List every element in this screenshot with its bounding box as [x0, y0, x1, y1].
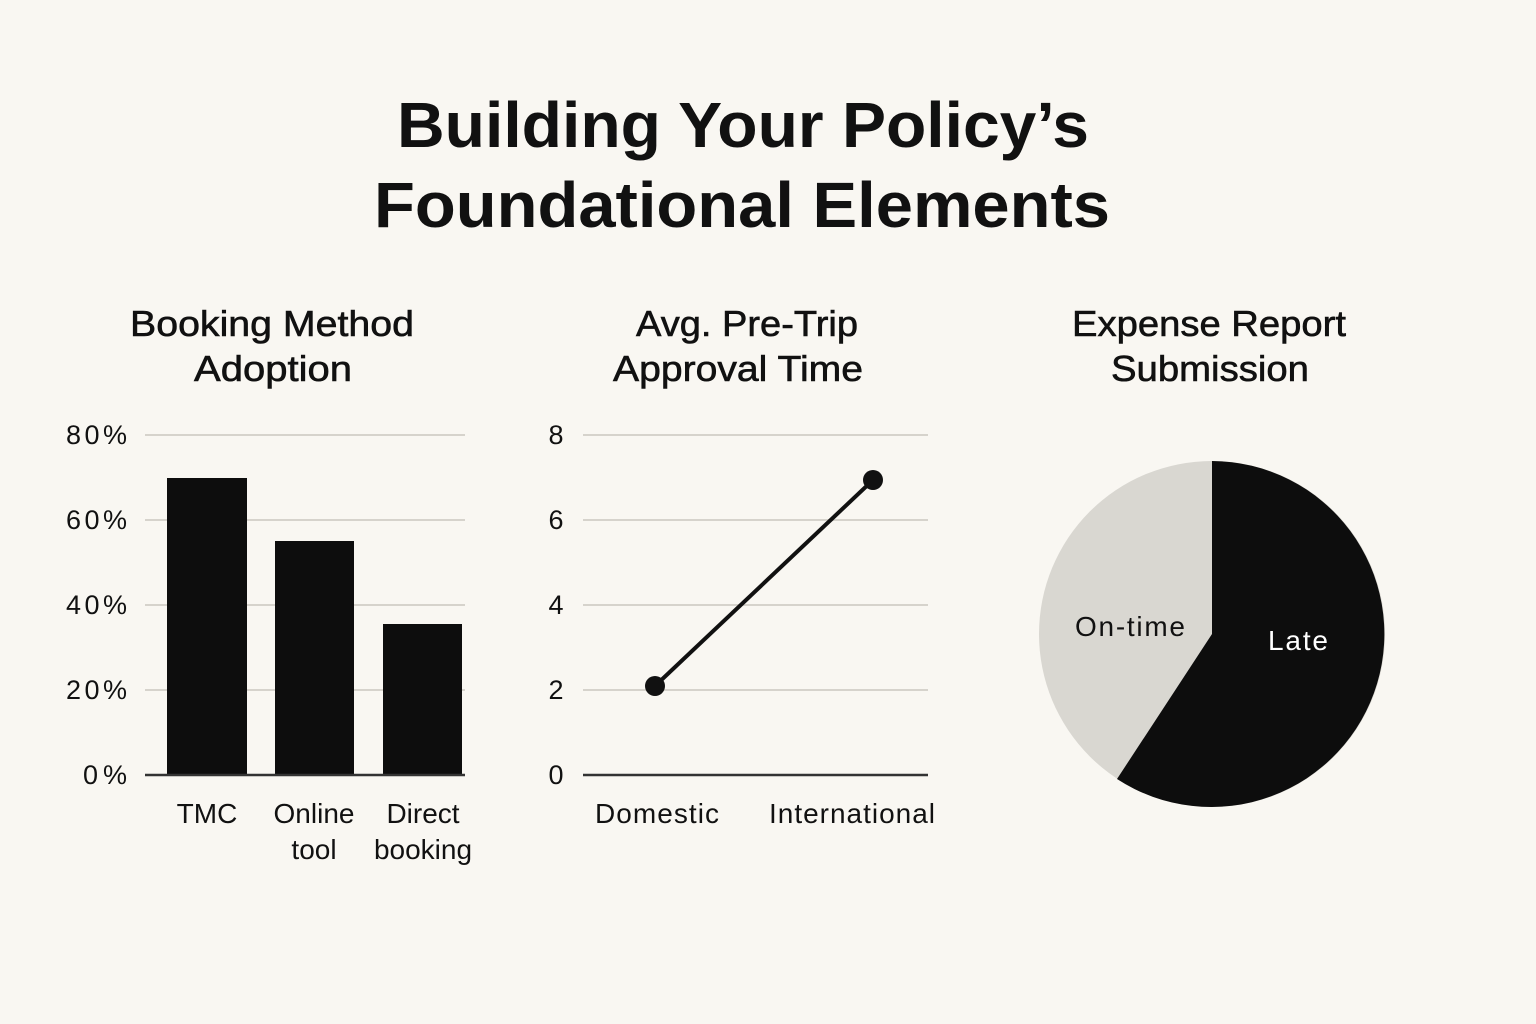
y-axis labels: 0%: [83, 760, 127, 790]
panel: booking method bar chart: [66, 303, 472, 865]
y-axis labels: 20%: [66, 675, 127, 705]
y-axis labels: 40%: [66, 590, 127, 620]
pie: On-time: [1075, 611, 1185, 642]
x-axis labels: tool: [291, 834, 337, 865]
x-axis labels: TMC: [177, 798, 237, 829]
y-axis labels: 80%: [66, 420, 127, 450]
y-axis labels: 4: [548, 590, 564, 620]
y-axis labels: [66, 420, 127, 790]
x-axis labels: Domestic: [595, 798, 719, 829]
heading: booking method: Booking Method: [130, 303, 414, 344]
x-axis labels: [177, 798, 472, 865]
y-axis labels: 8: [548, 420, 564, 450]
heading: booking method: Adoption: [194, 348, 352, 389]
heading: approval time: [613, 303, 863, 389]
title: Foundational Elements: [374, 169, 1110, 241]
heading: expense report: Submission: [1111, 348, 1309, 389]
x-axis labels: booking: [374, 834, 472, 865]
heading: booking method: [130, 303, 414, 389]
y-axis labels: 60%: [66, 505, 127, 535]
title: [374, 89, 1110, 241]
y-axis labels: 6: [548, 505, 564, 535]
x-axis labels: Online: [274, 798, 354, 829]
heading: approval time: Avg. Pre-Trip: [636, 303, 858, 344]
y-axis labels: 2: [548, 675, 564, 705]
heading: expense report: [1072, 303, 1346, 389]
heading: expense report: Expense Report: [1072, 303, 1346, 344]
pie: Late: [1268, 625, 1328, 656]
panel: expense report pie chart: [1039, 303, 1385, 807]
x-axis labels: Direct: [386, 798, 460, 829]
pie: [1039, 461, 1385, 807]
panel: approval time line chart: [548, 303, 935, 829]
bars: [167, 478, 462, 775]
heading: approval time: Approval Time: [613, 348, 863, 389]
x-axis labels: International: [769, 798, 935, 829]
x-axis labels: [595, 798, 935, 829]
title: Building Your Policy’s: [397, 89, 1089, 161]
y-axis labels: [548, 420, 564, 790]
y-axis labels: 0: [548, 760, 564, 790]
line series: [645, 470, 883, 696]
